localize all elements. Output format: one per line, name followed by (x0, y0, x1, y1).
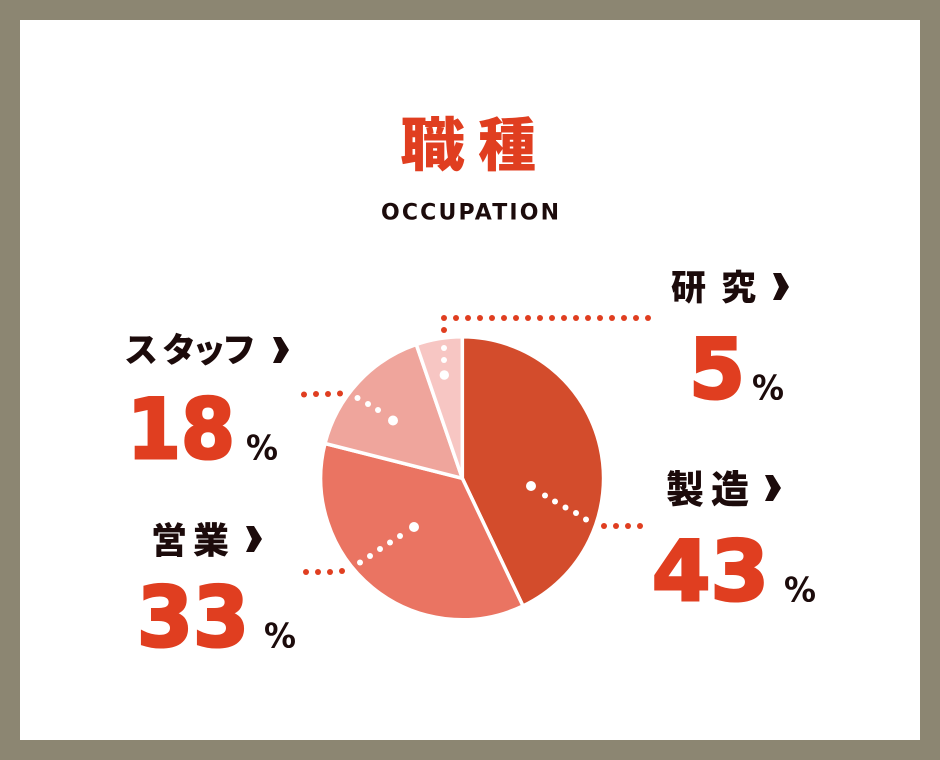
icon: chevron (273, 337, 289, 363)
title: 職 (400, 114, 465, 178)
leader: 営業 (303, 522, 419, 575)
value: 43: 43 (652, 523, 769, 620)
leader: スタッフ (301, 390, 398, 426)
leader: 製造 (526, 481, 643, 529)
callout: スタッフ 18% (124, 332, 289, 478)
subtitle: OCCUPATION (381, 200, 559, 226)
label: 営業: 営業 (151, 520, 229, 561)
unit: %: % (246, 428, 278, 468)
title: 種 (478, 114, 536, 178)
leader: 研究 (440, 315, 651, 380)
value: 5: 5 (689, 321, 745, 418)
label: 製造: 製造 (666, 470, 749, 512)
label: スタッフ: スタッフ (124, 332, 256, 370)
slice: 営業 33% (321, 444, 523, 620)
icon: chevron (765, 475, 781, 501)
pie chart (321, 337, 604, 620)
icon: chevron (773, 273, 789, 300)
slice: 研究 5% (416, 337, 462, 478)
slice: 製造 43% (462, 337, 604, 606)
unit: %: % (752, 368, 784, 408)
unit: %: % (784, 570, 816, 610)
callout: 営業 33% (137, 520, 296, 666)
callout: 研究 5% (671, 269, 789, 418)
value: 33: 33 (137, 569, 249, 666)
unit: %: % (264, 616, 296, 656)
callout: 製造 43% (652, 470, 816, 620)
slice: スタッフ 18% (325, 344, 462, 478)
icon: chevron (246, 526, 262, 552)
title (400, 114, 536, 178)
value: 18: 18 (127, 381, 235, 478)
label: 研究: 研究 (671, 269, 756, 308)
